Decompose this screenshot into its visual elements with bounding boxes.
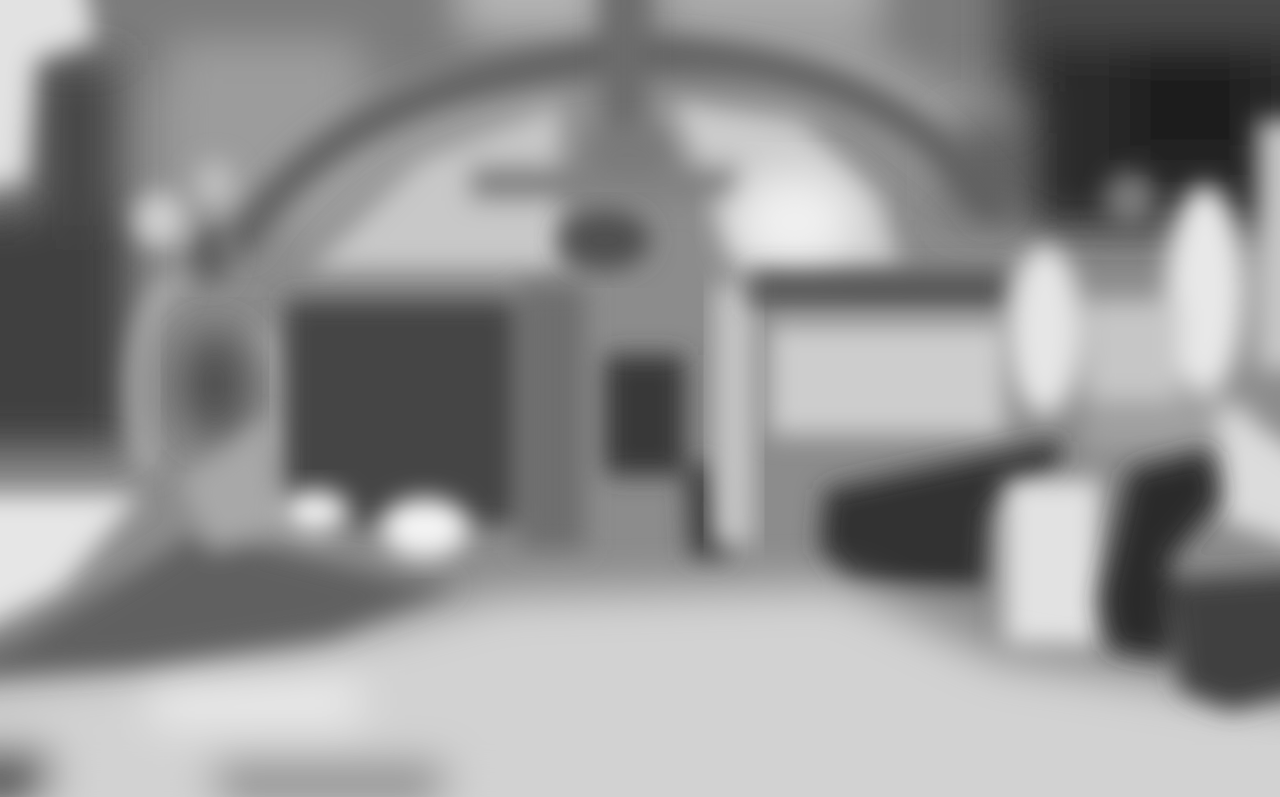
arch rib — [235, 55, 1000, 250]
pale figures, right — [1005, 120, 1280, 645]
figure outline, left — [138, 280, 281, 470]
central dark knot — [560, 210, 650, 270]
bright arch window — [310, 0, 900, 270]
upper wall and vault — [0, 0, 1280, 250]
brightest window glow — [733, 172, 857, 272]
dark figure, lower right — [1100, 450, 1280, 710]
dark corner, upper right — [950, 0, 1280, 230]
dark animal shape — [820, 440, 1060, 645]
floor — [0, 585, 1280, 797]
top-left light patch — [0, 0, 235, 283]
pale column — [715, 285, 753, 545]
left light floor patch — [0, 495, 140, 640]
dark foreground, lower left — [0, 420, 460, 675]
dark left wall — [0, 60, 130, 450]
bright spots — [281, 490, 469, 558]
floor underlay — [0, 745, 1280, 797]
figure core, left — [181, 330, 249, 440]
central dark panel — [285, 285, 730, 560]
right beam and light wall — [750, 272, 1010, 435]
